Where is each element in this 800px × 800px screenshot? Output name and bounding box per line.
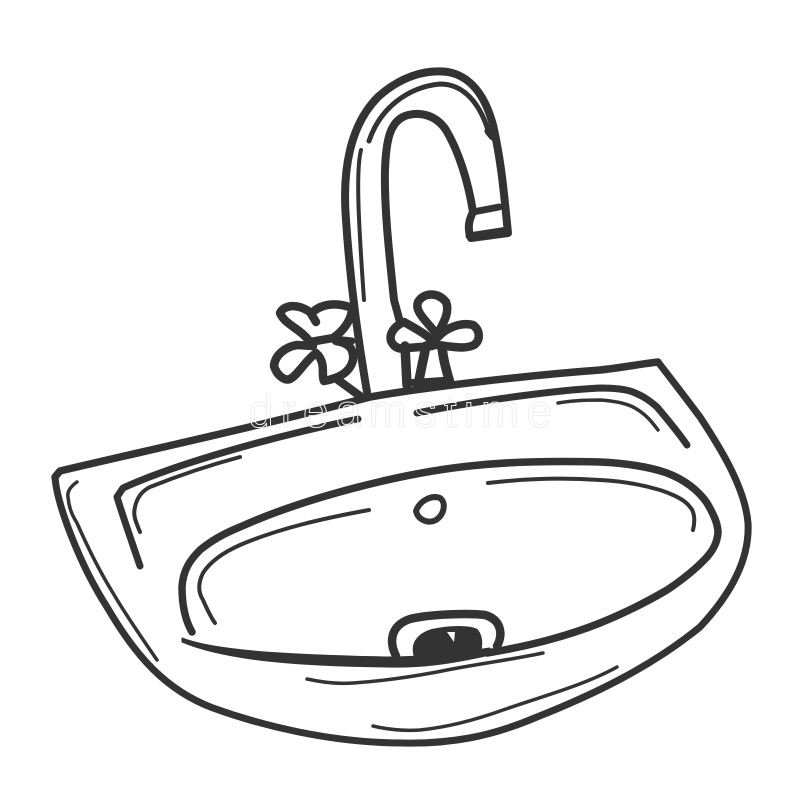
sink rim inner line <box>68 388 687 660</box>
basin <box>182 461 718 667</box>
lower basin highlights <box>307 653 617 730</box>
watermark: dreamstime <box>248 385 553 437</box>
drain <box>392 614 500 660</box>
sink outer body <box>55 362 748 743</box>
right handle <box>391 294 479 385</box>
overflow hole <box>416 497 444 522</box>
sink back edge <box>55 362 658 477</box>
left handle <box>274 304 360 396</box>
faucet <box>345 71 508 392</box>
